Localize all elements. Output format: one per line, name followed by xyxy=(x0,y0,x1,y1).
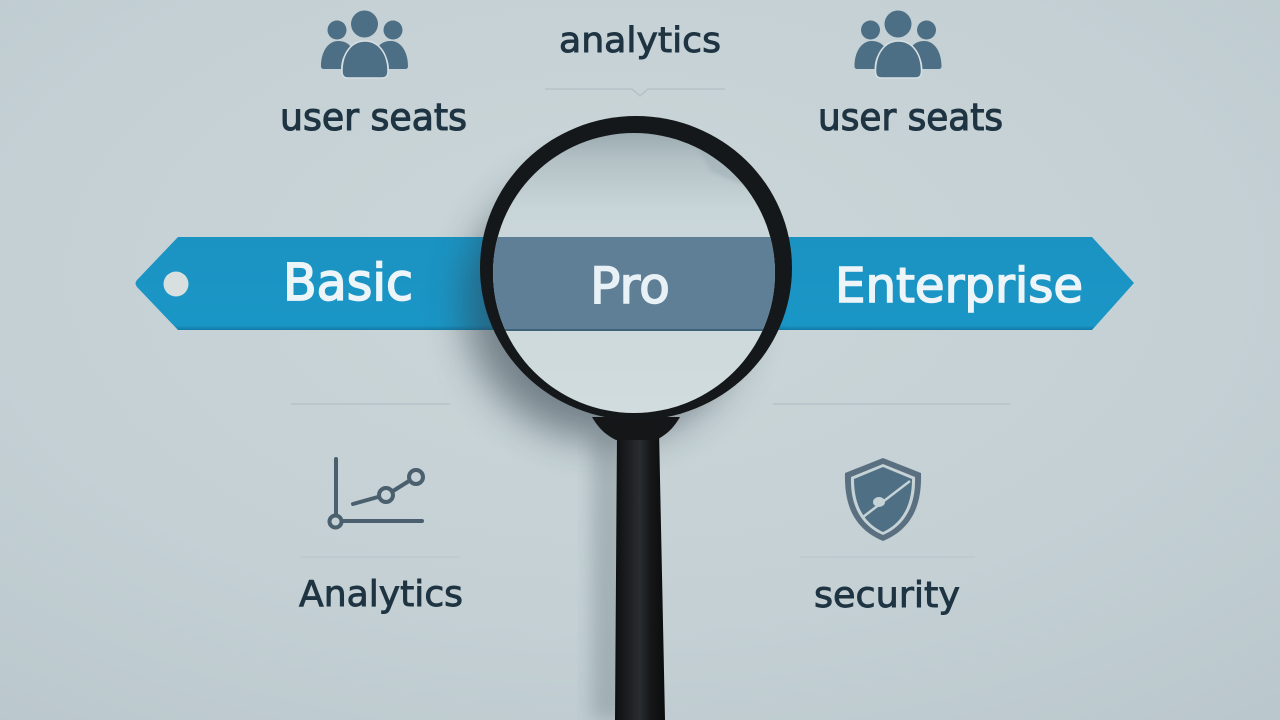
Pro tier band xyxy=(490,237,780,331)
icon: security shield xyxy=(845,458,921,541)
user seats label left: user seats xyxy=(280,96,467,139)
icon: user seats left xyxy=(321,10,408,78)
Enterprise label: Enterprise xyxy=(835,258,1083,314)
magnifier cast shadow xyxy=(465,170,745,720)
icon: analytics chart xyxy=(330,459,423,528)
magnifier ring xyxy=(480,116,792,420)
analytics label top: analytics xyxy=(559,21,721,61)
divider lines xyxy=(291,89,1010,557)
Pro label: Pro xyxy=(590,257,670,315)
Basic label: Basic xyxy=(283,254,413,313)
icon: user seats right xyxy=(854,10,942,78)
security label: security xyxy=(814,575,960,616)
Analytics label bottom: Analytics xyxy=(299,574,463,615)
ribbon: plan tiers xyxy=(136,237,1134,330)
magnifier handle xyxy=(615,430,665,720)
ribbon hole xyxy=(164,272,188,296)
magnifying glass xyxy=(480,116,792,720)
magnifier collar xyxy=(592,417,680,440)
user seats label right: user seats xyxy=(818,96,1003,139)
lens xyxy=(490,130,780,420)
